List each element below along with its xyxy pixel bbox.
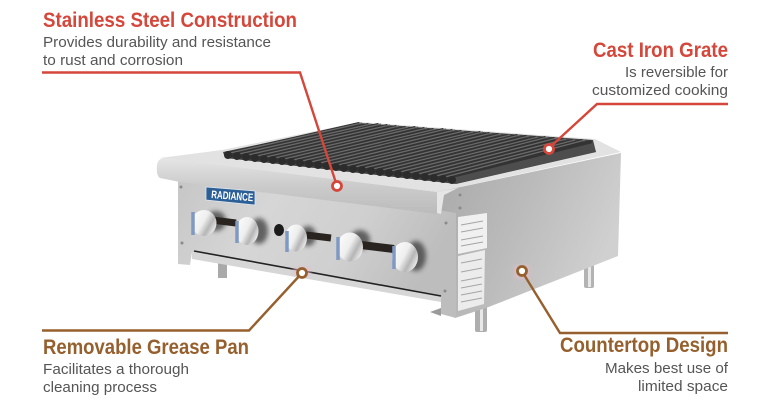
knob assembly bars — [212, 220, 394, 249]
knobs — [192, 210, 418, 272]
corner fold — [437, 188, 458, 214]
data plate labels — [458, 213, 487, 311]
legs — [218, 258, 594, 332]
screws — [180, 186, 462, 292]
pointer: countertop — [518, 266, 728, 333]
cast iron grate — [223, 123, 596, 184]
callout: cast iron grate — [592, 39, 728, 99]
callout: countertop design: Makes best use of — [605, 360, 729, 377]
grease pan — [192, 251, 441, 316]
callout: countertop design — [560, 334, 729, 395]
product: charbroiler — [157, 122, 621, 332]
brand logo: RADIANCE — [211, 189, 254, 204]
top surface — [160, 122, 621, 192]
callout: stainless steel construction: Provides durability and resistance — [43, 34, 271, 51]
callout: cast iron grate: Cast Iron Grate — [593, 39, 728, 62]
front lip — [157, 158, 437, 214]
pointer: cast iron grate — [544, 104, 728, 154]
callout: cast iron grate: Is reversible for — [625, 64, 728, 81]
callout: countertop design: limited space — [638, 378, 728, 395]
callout: stainless steel construction: Stainless Steel Construction — [43, 9, 297, 32]
pointer: grease pan — [42, 268, 306, 330]
pink artifacts on panels — [293, 265, 530, 279]
knob shadows — [206, 211, 426, 271]
callout: removable grease pan: cleaning process — [43, 379, 157, 396]
side panel — [437, 153, 621, 318]
front panel — [178, 178, 456, 318]
brand logo — [206, 187, 255, 205]
pointer: stainless steel — [42, 72, 342, 190]
callout: removable grease pan — [43, 336, 249, 396]
callout: stainless steel construction: to rust and corrosion — [43, 52, 183, 69]
callout: removable grease pan: Removable Grease Pan — [43, 336, 249, 359]
callout: cast iron grate: customized cooking — [592, 82, 728, 99]
callout: countertop design: Countertop Design — [560, 334, 728, 357]
callout: removable grease pan: Facilitates a thorough — [43, 361, 189, 378]
callout: stainless steel construction — [43, 9, 297, 69]
